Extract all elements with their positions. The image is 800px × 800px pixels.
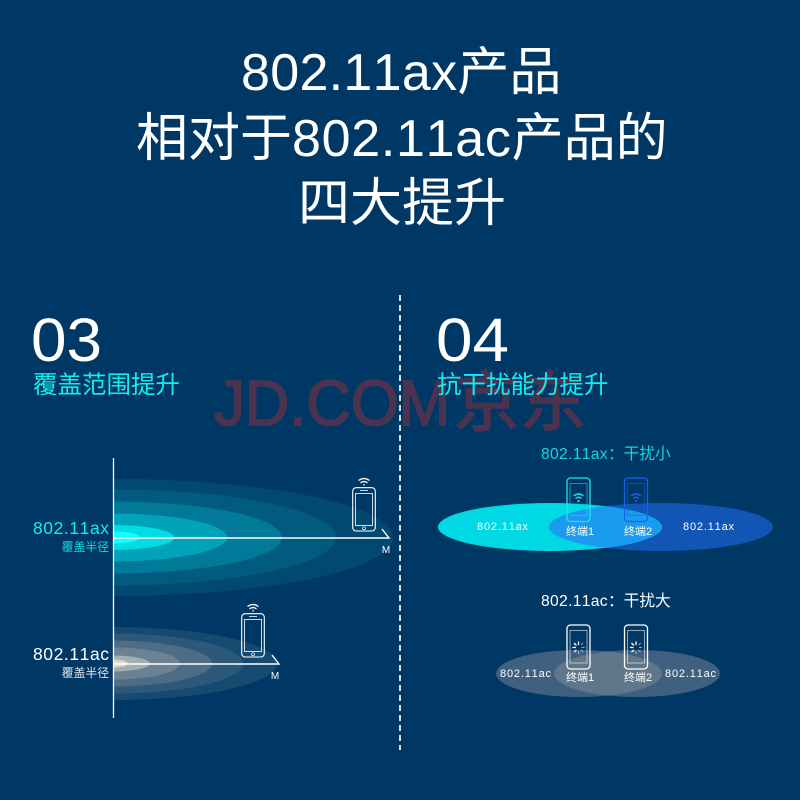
icon: terminal 1 phone xyxy=(567,478,590,522)
section heading: interference: 抗干扰能力提升 xyxy=(437,371,608,399)
label: right 802.11ac: 802.11ac xyxy=(665,668,716,680)
section number 03: 03 xyxy=(31,306,102,374)
chart: 802.11ax coverage rings xyxy=(114,479,393,596)
icon: phone with wifi (ac) xyxy=(242,604,264,657)
diagram: 802.11ax overlapping ellipses xyxy=(438,503,773,551)
label: left 802.11ac: 802.11ac xyxy=(500,668,552,680)
label: ac radius: 覆盖半径 xyxy=(62,666,109,680)
label: terminal 1 grey: 终端1 xyxy=(566,670,594,684)
watermark: JD.COM xyxy=(214,367,450,439)
label: left 802.11ax: 802.11ax xyxy=(477,521,528,533)
icon: terminal 2 phone xyxy=(624,478,648,522)
section number 04: 04 xyxy=(436,306,509,374)
axis arrow: 802.11ax xyxy=(113,529,389,538)
label: terminal 2 grey: 终端2 xyxy=(624,670,652,684)
icon: terminal 2 phone loading xyxy=(624,625,648,669)
axis arrow: 802.11ac xyxy=(113,655,279,664)
section heading: coverage: 覆盖范围提升 xyxy=(33,371,180,399)
title xyxy=(136,44,668,233)
title: 相对于802.11ac产品的 xyxy=(136,110,668,168)
axis unit M (ax): M xyxy=(382,545,390,556)
divider xyxy=(399,295,401,750)
label: ax radius: 覆盖半径 xyxy=(62,540,109,554)
watermark: 京东 xyxy=(454,366,586,439)
axis unit M (ac): M xyxy=(271,671,279,682)
label: terminal 1: 终端1 xyxy=(566,524,594,538)
title: 802.11ax产品 xyxy=(241,44,561,102)
diagram: 802.11ac overlapping ellipses xyxy=(496,650,720,697)
chart: 802.11ac coverage rings xyxy=(114,627,277,700)
heading: 802.11ax low interference: 802.11ax：干扰小 xyxy=(541,445,671,463)
label: 802.11ac: 802.11ac xyxy=(33,644,109,664)
panel: coverage xyxy=(34,318,393,718)
heading: 802.11ac high interference: 802.11ac：干扰大 xyxy=(541,592,671,610)
icon: terminal 1 phone loading xyxy=(567,625,590,669)
title: 四大提升 xyxy=(298,175,506,233)
label: terminal 2: 终端2 xyxy=(624,524,652,538)
icon: phone with wifi (ax) xyxy=(353,478,375,531)
label: right 802.11ax: 802.11ax xyxy=(683,521,734,533)
watermark xyxy=(214,366,586,439)
panel: interference xyxy=(436,306,773,697)
vertical axis xyxy=(112,458,114,718)
label: 802.11ax: 802.11ax xyxy=(33,518,109,538)
